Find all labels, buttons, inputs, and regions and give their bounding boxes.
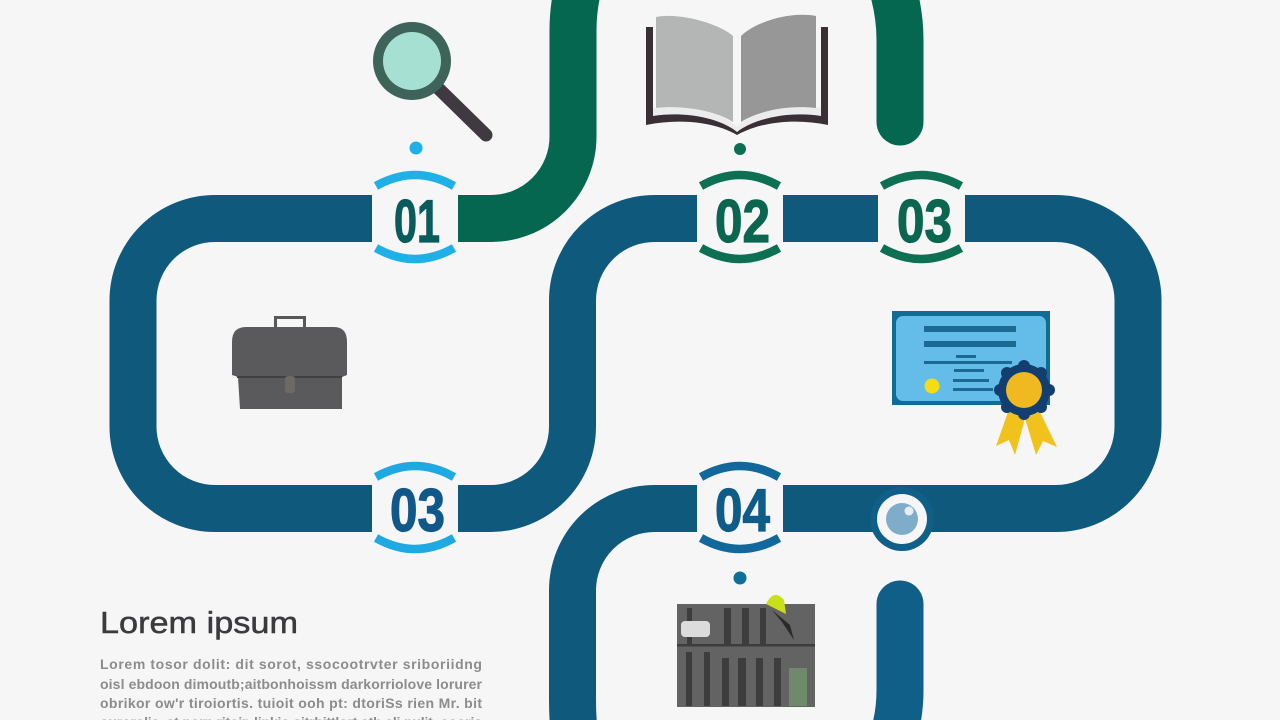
badge: 02: 02 xyxy=(715,188,770,255)
badge: 01: 01 xyxy=(394,188,440,255)
dot: step 01 marker xyxy=(410,142,422,154)
dot: step 02 marker xyxy=(734,143,746,155)
icon: certificate xyxy=(892,311,1057,455)
text block: obrikor ow'r tiroiortis. tuioit ooh pt: dtoriSs rien Mr. bit xyxy=(100,695,482,711)
text block: Lorem tosor dolit: dit sorot, ssocootrvter sriboriidng xyxy=(100,656,482,672)
badge: 04 xyxy=(697,460,783,555)
badge: 04: 04 xyxy=(715,477,771,544)
path: lower right blue stub xyxy=(890,604,900,720)
icon: eye marker xyxy=(870,487,934,551)
path: upper right green stub xyxy=(890,0,900,122)
badge: 03 green xyxy=(878,170,965,264)
icon: open book xyxy=(646,15,828,135)
badge: 03 blue xyxy=(372,460,458,555)
text block xyxy=(100,656,483,720)
icon: server cabinet xyxy=(677,595,815,707)
dot: step 04 marker xyxy=(734,572,746,584)
path: blue route xyxy=(133,218,1138,720)
badge: 03 blue: 03 xyxy=(390,477,445,544)
badge: 02 xyxy=(697,170,783,264)
icon: magnifying glass xyxy=(373,22,486,135)
heading: Lorem ipsum xyxy=(100,605,298,640)
icon: briefcase xyxy=(232,318,347,409)
badge: 03 green: 03 xyxy=(897,188,952,255)
path: green route xyxy=(450,0,580,219)
text block: oisl ebdoon dimoutb;aitbonhoissm darkorriolove lorurer xyxy=(100,676,483,692)
badge: 01 xyxy=(372,170,458,264)
